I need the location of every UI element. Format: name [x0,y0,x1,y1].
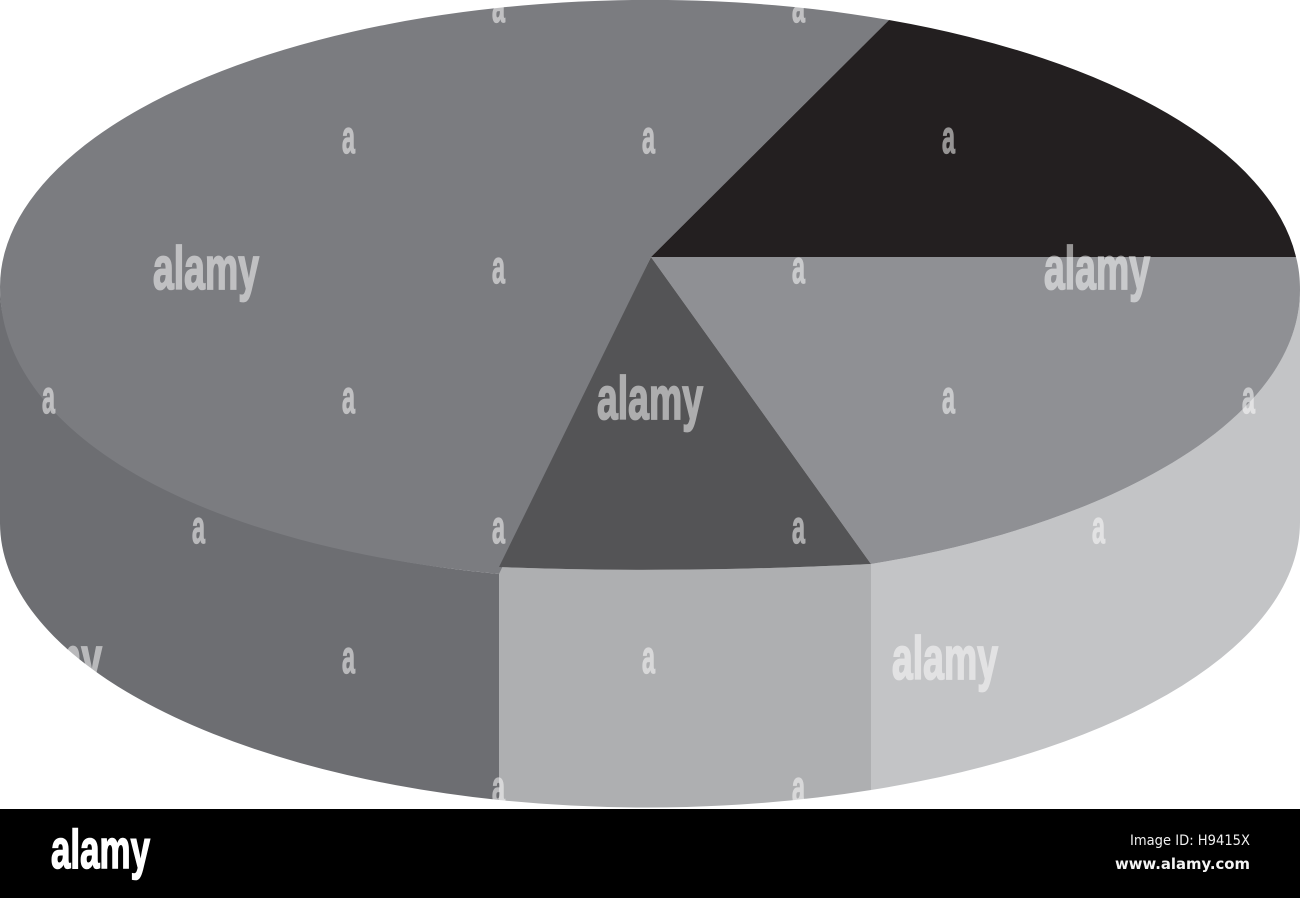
watermarks: a [1242,371,1255,423]
watermarks: a [342,371,355,423]
watermarks: a [342,631,355,683]
watermarks: a [942,111,955,163]
watermarks: a [942,371,955,423]
watermarks: alamy [153,235,259,302]
watermarks: a [192,501,205,553]
side wall: left dark segment [0,287,499,800]
watermarks: alamy [1044,235,1150,302]
slice: black [651,20,1296,257]
watermarks: a [492,241,505,293]
watermarks: alamy [597,365,703,432]
watermarks: a [792,761,805,813]
footer bar [0,809,1300,898]
image id: Image ID: H9415X [1130,833,1250,849]
watermarks: a [492,501,505,553]
watermarks: a [492,761,505,813]
website: www.alamy.com [1115,855,1250,873]
watermarks: a [1092,501,1105,553]
watermarks: a [642,111,655,163]
watermarks: a [792,241,805,293]
watermarks: alamy [0,625,102,692]
watermarks: a [792,501,805,553]
side wall: right light segment [871,290,1300,790]
watermarks: a [42,371,55,423]
slice: large grey [0,0,889,574]
side wall: middle segment [499,564,871,807]
slice: medium grey [651,257,1300,564]
watermarks: a [342,111,355,163]
watermarks: a [642,631,655,683]
slice: dark grey triangle [499,257,871,570]
watermarks: alamy [892,625,998,692]
footer logo: alamy [51,818,150,880]
